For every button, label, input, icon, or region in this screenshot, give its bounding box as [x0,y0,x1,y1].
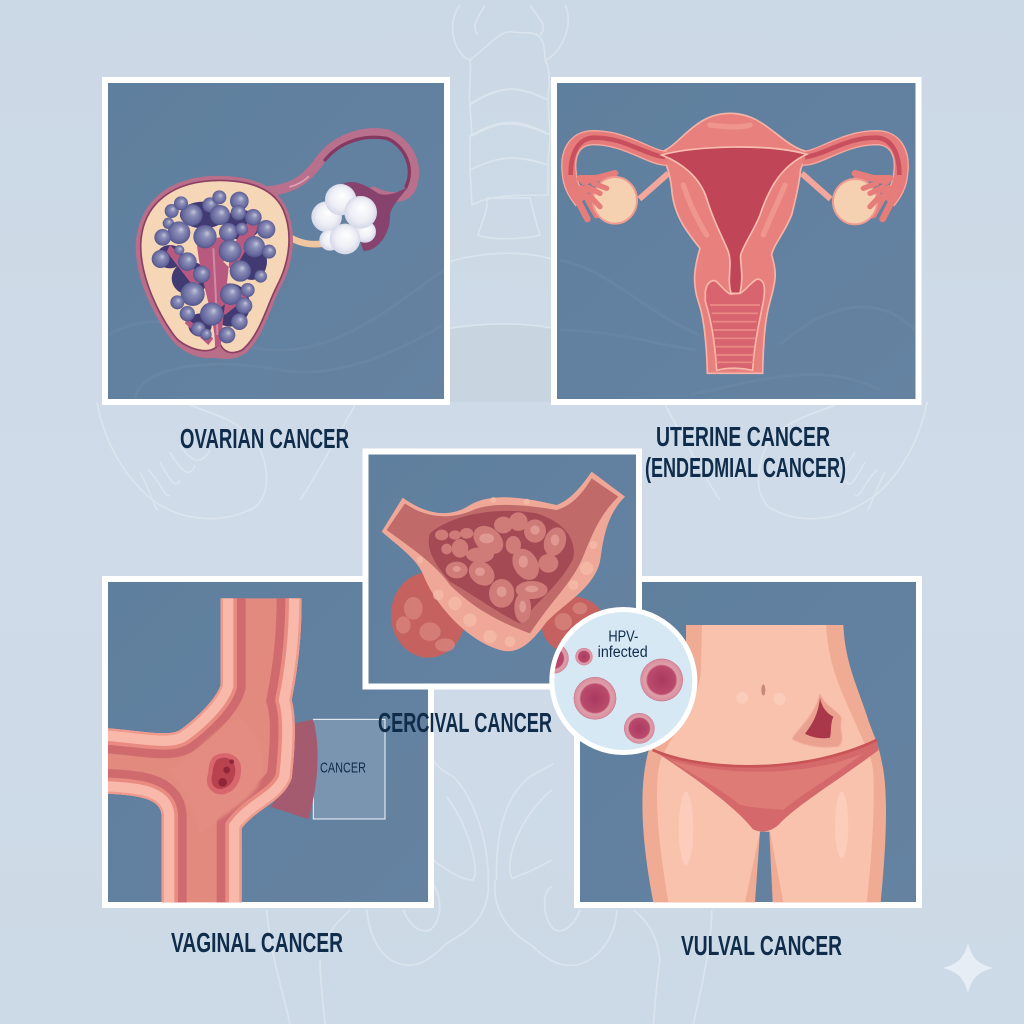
right tube and ovary [803,138,901,224]
left ligament [639,173,668,199]
panel frame [577,579,919,905]
label: vaginal cancer: VAGINAL CANCER [171,927,343,958]
cavity [662,147,807,293]
panel: ovarian cancer [105,80,447,402]
muscle ends [387,478,618,633]
underwear [653,740,879,832]
callout: hpv-infected cells [538,607,697,755]
label: endedmial cancer: (ENDEDMIAL CANCER) [645,452,846,483]
panel: vulval cancer [577,579,919,905]
panel frame [105,80,447,402]
torso skin [657,625,874,902]
right ligament [802,173,831,199]
callout text line 1: HPV- [608,629,638,646]
inner stalks [167,218,260,347]
canal ridges [710,305,760,362]
ovary stalk mass [343,182,408,251]
tumour nodules [435,512,570,623]
panel: uterine cancer [554,80,918,402]
lesion [207,753,241,794]
canal tube [108,598,302,902]
panel frame [366,452,639,686]
callout fill [554,612,692,750]
panel frame [554,80,918,402]
panel: cervical cancer [366,452,639,686]
callout circle [549,607,697,755]
wedge overlap [293,719,318,819]
navel [761,684,765,696]
uterus body [660,113,810,373]
label: ovarian cancer: OVARIAN CANCER [180,423,349,454]
white tumour cluster [311,184,377,254]
nodule highlights [453,525,559,613]
inner dark tissue [157,202,267,337]
wedge to callout [270,719,318,819]
vaginal canal [705,279,765,370]
label: uterine cancer: UTERINE CANCER [656,421,830,452]
wall nodules [417,497,597,647]
callout text line 2: infected [598,644,648,661]
highlights [679,692,848,865]
panel: vaginal cancer [102,576,434,908]
icon: sparkle [943,943,993,993]
left tube and ovary [569,138,667,224]
peach stalk [288,237,327,244]
callout label: CANCER [320,761,366,777]
central lighter patch [167,718,263,835]
cells [554,646,683,744]
outer tumour lobes [391,572,605,658]
wall highlights [683,125,785,235]
cervix wall [382,472,625,651]
illustration: lower torso [642,625,886,902]
torso outline shading [642,625,886,902]
panel frame [105,579,431,905]
callout box [313,719,385,819]
tumour spheres [152,190,276,343]
label: cervical cancer: CERCIVAL CANCER [378,707,552,738]
illustration: ovary with tumour spheres [136,133,414,359]
illustration: cervix [382,472,625,658]
panel swirls [560,260,915,395]
illustration: vaginal canal [108,598,386,902]
illustration: uterus [569,113,901,373]
ovary body [136,176,293,359]
panel swirls [108,270,444,398]
label: vulval cancer: VULVAL CANCER [681,930,842,961]
wound [792,693,842,747]
inner cavity [429,511,574,623]
fallopian tube loop [263,133,414,197]
